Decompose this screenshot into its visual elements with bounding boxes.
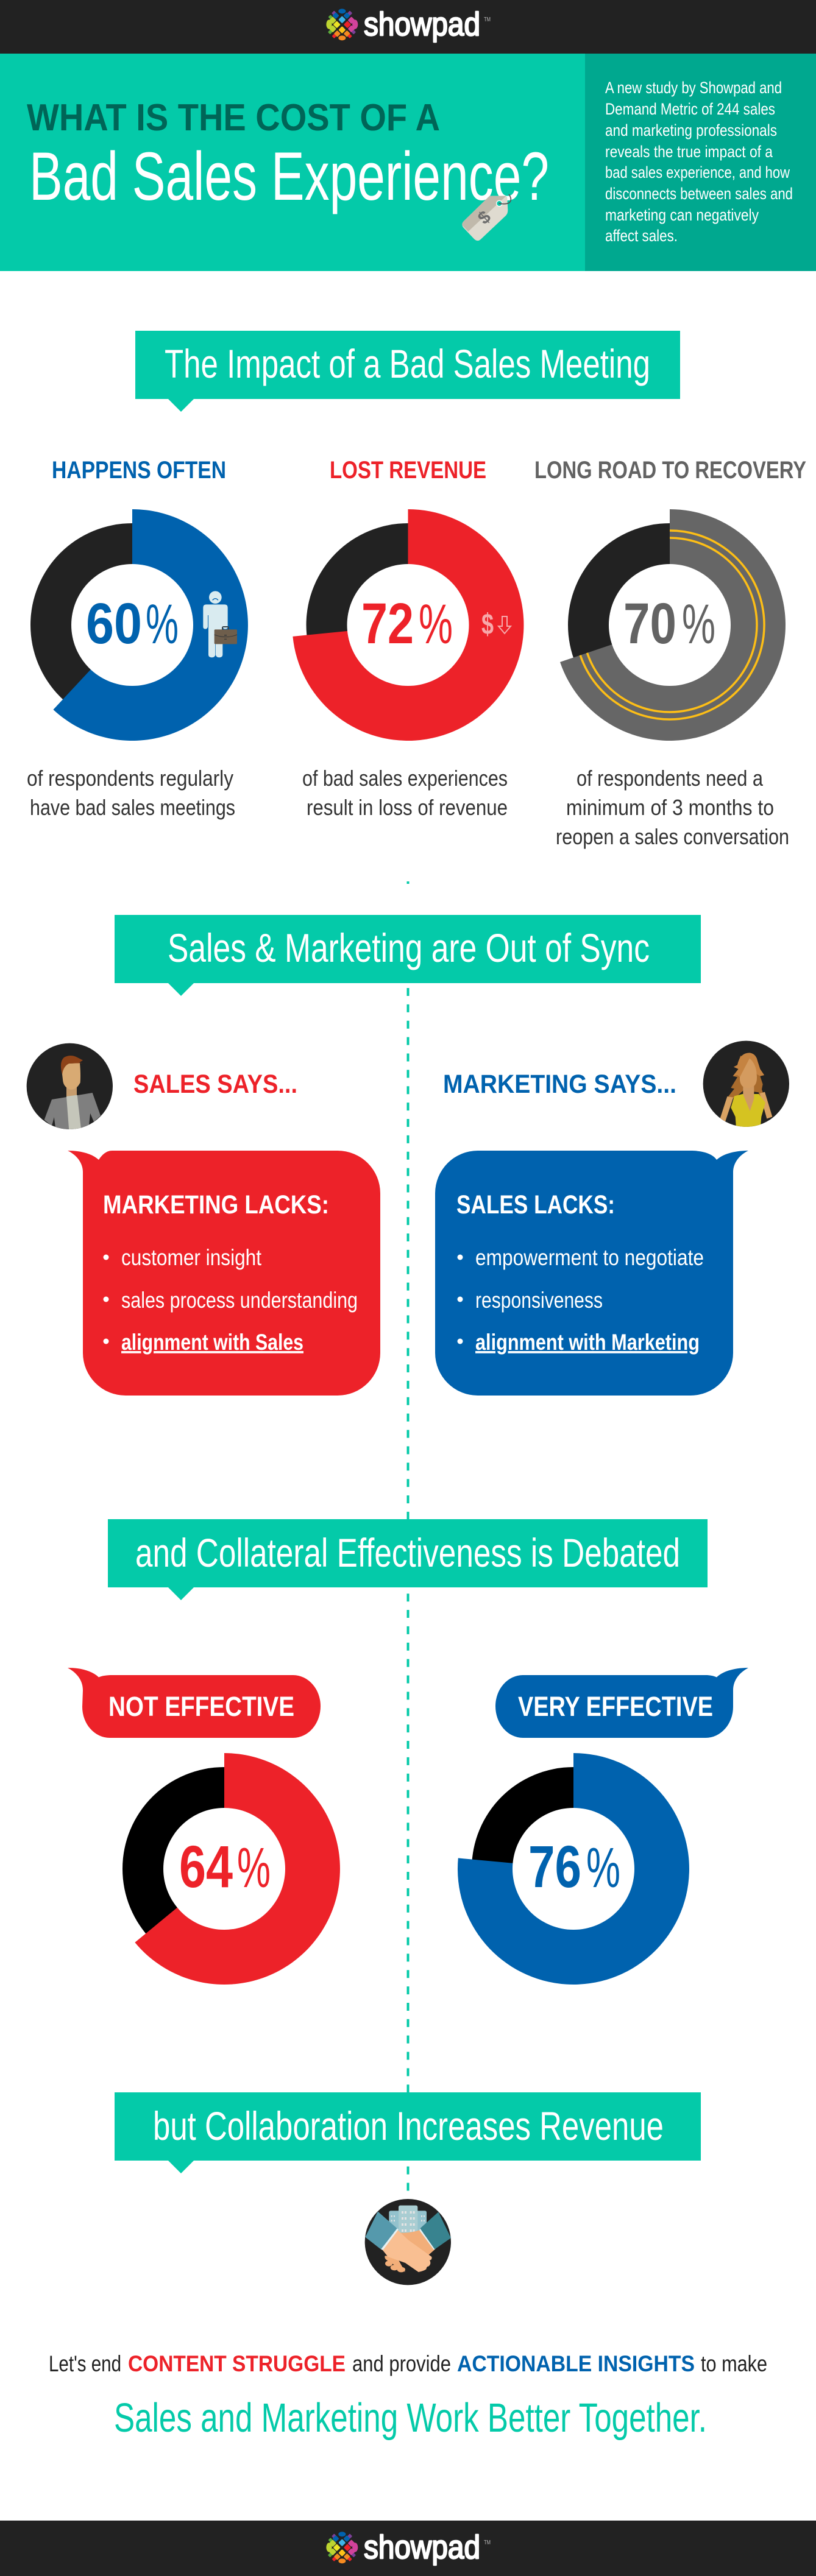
donut chart 64%: %	[237, 1836, 271, 1899]
footer bar	[0, 2521, 816, 2576]
closing statement: ACTIONABLE INSIGHTS	[457, 2351, 695, 2376]
heading: LOST REVENUE	[330, 457, 486, 484]
section banner: collateral	[108, 1519, 708, 1600]
bullet list: customer insight	[121, 1245, 262, 1270]
closing statement: to make	[701, 2351, 767, 2376]
icon: handshake	[365, 2199, 451, 2285]
bullet list: alignment with Sales	[121, 1330, 303, 1355]
panel: marketing bubble	[435, 1151, 748, 1396]
panel: very effective	[458, 1668, 748, 1985]
center dashed divider	[407, 881, 410, 2191]
caption	[27, 766, 235, 820]
panel: sales bubble	[68, 1151, 380, 1396]
icon: price tag: $	[474, 206, 495, 228]
donut chart 60%: 60	[86, 591, 142, 656]
panel: not effective	[68, 1668, 340, 1985]
closing statement: Let's end	[49, 2351, 121, 2376]
caption: minimum of 3 months to	[566, 795, 774, 820]
intro paragraph: reveals the true impact of a	[605, 143, 773, 161]
caption: result in loss of revenue	[307, 795, 508, 820]
panel: lost revenue	[293, 457, 523, 820]
donut chart 76%: %	[586, 1836, 620, 1899]
donut chart 60%: %	[146, 593, 179, 655]
bullet list: responsiveness	[475, 1288, 603, 1313]
donut chart 72%	[293, 509, 523, 741]
intro paragraph	[605, 79, 793, 245]
label bubble	[68, 1668, 321, 1738]
caption: have bad sales meetings	[30, 795, 235, 820]
donut chart 72%: %	[419, 593, 453, 655]
icon: dollar down	[481, 609, 511, 641]
closing statement: and provide	[352, 2351, 451, 2376]
donut chart 76%: 76	[528, 1833, 581, 1900]
bubble heading: SALES LACKS:	[456, 1190, 615, 1219]
caption: of respondents regularly	[27, 766, 233, 791]
caption	[556, 766, 789, 849]
heading: sales says: SALES SAYS...	[133, 1070, 297, 1099]
icon: price tag	[462, 194, 511, 241]
section banner: collaboration: but Collaboration Increases Revenue	[153, 2103, 664, 2148]
intro paragraph: A new study by Showpad and	[605, 79, 782, 97]
heading: marketing says: MARKETING SAYS...	[443, 1070, 676, 1099]
caption: of respondents need a	[577, 766, 764, 791]
bullet list	[457, 1245, 704, 1355]
caption: of bad sales experiences	[302, 766, 508, 791]
avatar: marketer	[703, 1041, 789, 1131]
avatar: salesman	[27, 1043, 113, 1131]
section banner: collateral: and Collateral Effectiveness is Debated	[135, 1530, 680, 1575]
section banner: impact	[135, 331, 680, 412]
bullet list	[104, 1245, 358, 1355]
bullet list: sales process understanding	[121, 1288, 358, 1313]
header bar	[0, 0, 816, 54]
bubble heading: MARKETING LACKS:	[103, 1190, 329, 1219]
section banner: collaboration	[115, 2092, 701, 2173]
label bubble: NOT EFFECTIVE	[108, 1691, 294, 1722]
logo: showpad: showpad	[364, 6, 480, 43]
donut chart 64%	[122, 1753, 340, 1985]
intro paragraph: and marketing professionals	[605, 121, 777, 139]
intro paragraph: Demand Metric of 244 sales	[605, 100, 775, 118]
bullet list: empowerment to negotiate	[475, 1245, 704, 1270]
section banner: out of sync: Sales & Marketing are Out of Sync	[168, 925, 650, 970]
title line 1: WHAT IS THE COST OF A	[27, 97, 440, 139]
donut chart 70% road: 70	[623, 591, 676, 656]
intro paragraph: marketing can negatively	[605, 206, 759, 224]
logo: showpad: TM	[484, 2539, 491, 2546]
logo: showpad: showpad	[364, 2529, 480, 2566]
panel: happens often	[27, 457, 248, 820]
closing statement	[49, 2351, 767, 2376]
section banner: impact: The Impact of a Bad Sales Meeting	[165, 341, 650, 386]
donut chart 72%: 72	[361, 591, 414, 656]
label bubble	[495, 1668, 748, 1738]
caption	[302, 766, 508, 820]
panel: long road to recovery	[534, 457, 806, 849]
donut chart 64%: 64	[179, 1833, 233, 1900]
donut chart 60%	[30, 509, 248, 741]
intro paragraph: affect sales.	[605, 227, 678, 245]
icon: dollar down: $	[481, 609, 494, 641]
donut chart 76%	[458, 1753, 689, 1985]
closing statement: CONTENT STRUGGLE	[128, 2351, 346, 2376]
heading: HAPPENS OFTEN	[52, 457, 226, 484]
donut chart 70% road	[560, 509, 786, 741]
section banner: out of sync	[115, 915, 701, 996]
label bubble: VERY EFFECTIVE	[518, 1691, 713, 1722]
icon: sad person with briefcase	[203, 591, 237, 657]
logo: showpad: TM	[484, 16, 491, 23]
title line 2: Bad Sales Experience?	[29, 138, 549, 214]
hero panel	[0, 54, 816, 271]
bullet list: alignment with Marketing	[475, 1330, 700, 1355]
donut chart 70% road: %	[682, 593, 715, 655]
